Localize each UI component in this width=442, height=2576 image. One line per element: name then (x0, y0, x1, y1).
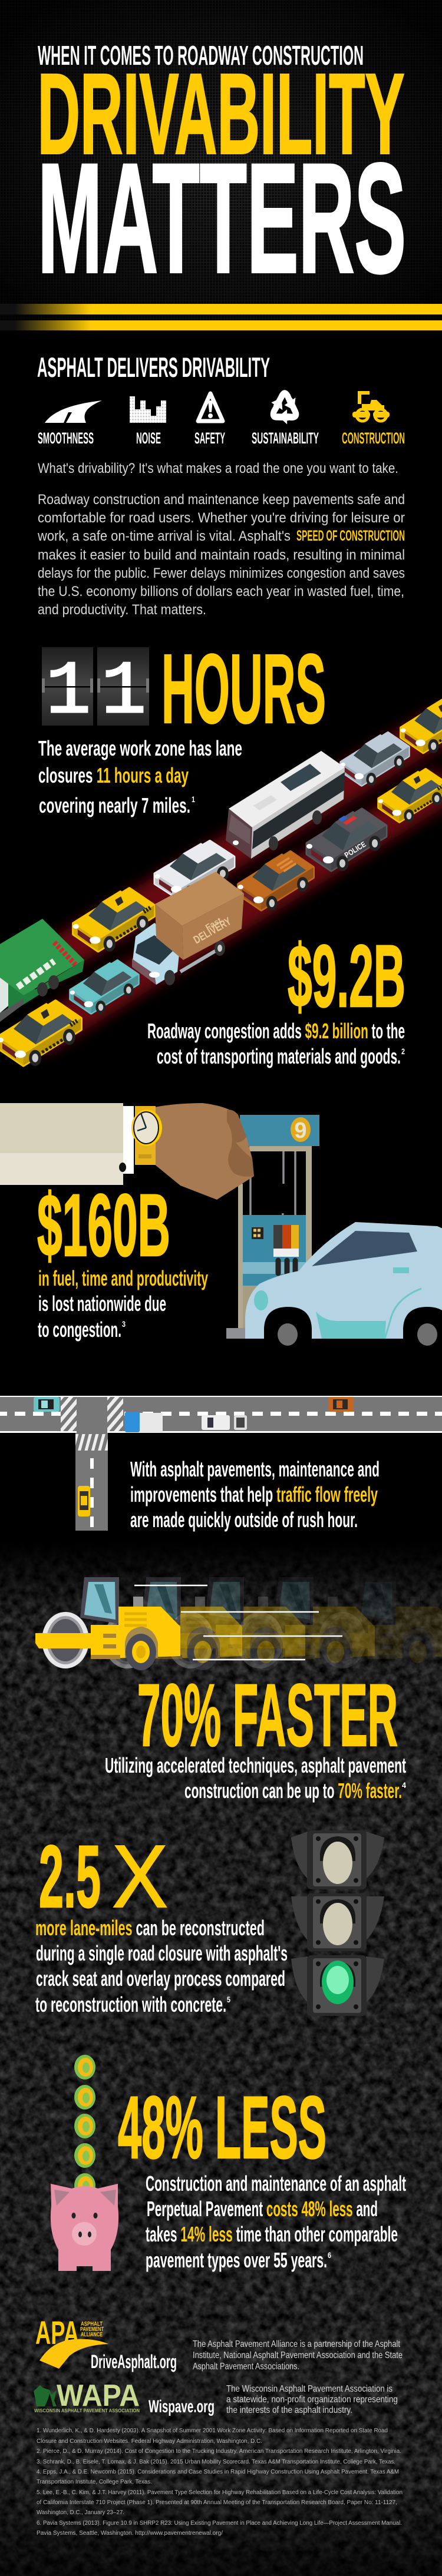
flip clock: 11: 1 (101, 650, 146, 735)
car at pump (245, 1222, 442, 1349)
logo: asphalt pavement alliance: ASPHALT (81, 2320, 103, 2327)
text: wapa description (226, 2384, 398, 2415)
text: traffic flow freely: improvements that help traffic flow freely (130, 1482, 378, 1506)
police car: POLICE (343, 839, 368, 860)
teal car (34, 1397, 60, 1412)
text: cost comparison: Perpetual Pavement costs 48% less and (147, 2197, 378, 2221)
website: wispave: Wispave.org (149, 2397, 215, 2416)
text: cost comparison (146, 2171, 406, 2272)
text: apa description (193, 2339, 403, 2372)
icon: noise equalizer (130, 396, 166, 423)
logo: asphalt pavement alliance (35, 2314, 108, 2369)
text: wapa description: the interests of the asphalt industry. (226, 2405, 352, 2415)
vertical road (75, 1433, 108, 1531)
top view cars (34, 1397, 354, 1517)
main roller (35, 1577, 180, 1670)
white van (202, 1415, 247, 1430)
coins falling (74, 2055, 95, 2198)
icon: sustainability recycle (268, 393, 300, 426)
icon: construction roller (352, 391, 390, 421)
top signal (307, 1830, 367, 1889)
logo: wapa: WISCONSIN ASPHALT PAVEMENT ASSOCIATION (34, 2408, 140, 2413)
panel: asphalt delivers drivability: SMOOTHNESS (38, 429, 94, 447)
body paragraph: makes it easier to build and maintain roads, resulting in minimal (38, 547, 405, 563)
ghost roller 2 (160, 1577, 305, 1670)
delivery truck: Fast (204, 915, 223, 932)
body paragraph: comfortable for road users. Whether you're driving for leisure or (38, 510, 405, 526)
text: average work zone (38, 736, 242, 817)
fuel hoses (250, 1151, 296, 1284)
taxi top right (400, 696, 442, 753)
title (38, 40, 406, 306)
page black background (0, 330, 442, 1567)
text: fuel time productivity: in fuel, time and productivity (38, 1266, 208, 1290)
station sign (240, 1115, 319, 1146)
hand (154, 1103, 254, 1200)
sleeve (0, 1103, 123, 1185)
stat: 2.5x: X (112, 1826, 168, 1926)
shirt cuff (123, 1106, 134, 1174)
body paragraph (37, 492, 405, 618)
orange car (328, 1397, 354, 1412)
traffic light (291, 1830, 384, 2016)
references: 1. Wunderlich, K., & D. Hardesty (2003). A Snapshot of Summer 2001 Work Zone Activity: Based on Information Reported on State Road (37, 2428, 388, 2434)
bottom signal lit green (307, 1955, 367, 2016)
panel: asphalt delivers drivability: SAFETY (194, 429, 225, 447)
label: sustainability: SUSTAINABILITY (252, 429, 319, 447)
text: more lane miles: to reconstruction with concrete. (35, 1992, 226, 2017)
references: 2. Pierce, D., & D. Murray (2014). Cost of Congestion to the Trucking Industry. American Transportation Research Institute, Arlington, Virginia. (37, 2448, 401, 2455)
text: fuel time productivity: to congestion. (38, 1317, 121, 1342)
roller with motion trail (35, 1577, 442, 1670)
taxi bottom (0, 1001, 81, 1066)
blue and white truck (125, 1412, 163, 1432)
delivery truck: DELIVERY (192, 915, 233, 946)
references: of California Interstate 710 Project (Phase 1). Presented at 90th Annual Meeting of the Transportation Research Board, Paper No: 11-1127, (37, 2499, 397, 2506)
references (37, 2428, 403, 2537)
text: apa description: The Asphalt Pavement Alliance is a partnership of the Asphalt (193, 2339, 400, 2349)
cuff button (119, 1163, 126, 1172)
text: more lane miles (35, 1916, 288, 2017)
references: Transportation Institute, College Park, Texas. (37, 2479, 152, 2485)
delivery truck (132, 872, 244, 985)
body paragraph: the U.S. economy billions of dollars each year in wasted fuel, time, (38, 584, 404, 600)
icon: safety warning triangle (198, 393, 223, 421)
flip clock: 11 (42, 647, 149, 735)
ghost roller 1 (97, 1577, 242, 1670)
logo: asphalt pavement alliance: PAVEMENT (80, 2326, 104, 2333)
text: congestion cost: Roadway congestion adds $9.2 billion to the (147, 1019, 405, 1043)
references: 6. Pavia Systems (2013). Figure 10.9 in SHRP2 R23: Using Existing Pavement in Place and Achieving Long Life—Project Assessment Manual. (37, 2520, 402, 2527)
text: accelerated techniques: construction can be up to 70% faster. (184, 1779, 402, 1803)
panel: asphalt delivers drivability (37, 352, 405, 618)
watch (131, 1106, 162, 1165)
text: average work zone: closures 11 hours a day (38, 763, 189, 787)
text: wapa description: a statewide, non-profit organization representing (226, 2395, 398, 2405)
text: accelerated techniques (105, 1753, 406, 1803)
traffic jam illustration (0, 696, 442, 1066)
middle signal (307, 1893, 367, 1951)
text: accelerated techniques: 4 (402, 1780, 406, 1790)
flip clock: 11: 1 (46, 650, 91, 735)
references: 5. Lee, E.-B., C. Kim, & J.T. Harvey (2011). Pavement Type Selection for Highway Rehabilitation Based on a Life-Cycle Cost Analysis: Validation (37, 2489, 403, 2496)
ghost roller 3 (230, 1577, 375, 1670)
text: fuel time productivity: is lost nationwide due (38, 1292, 166, 1316)
brake light glow (35, 721, 442, 1039)
references: Washington, D.C., January 23–27. (37, 2509, 124, 2516)
references: 3. Schrank, D., B. Eisele, T. Lomax, & J. Bak (2015). 2015 Urban Mobility Scorecard. Texas A&M Transportation Institute, College Park, Texas. (37, 2459, 395, 2465)
stat: 2.5x: 2.5 (39, 1827, 101, 1926)
text: apa description: Asphalt Pavement Associations. (193, 2362, 299, 2372)
text: traffic flow freely (130, 1457, 380, 1532)
text: congestion cost (147, 1019, 405, 1068)
text: average work zone: The average work zone has lane (38, 736, 242, 760)
side wings (291, 1832, 384, 2002)
speed lines (134, 1585, 342, 1660)
text: fuel time productivity: 3 (122, 1319, 126, 1329)
white car (154, 841, 234, 900)
taxi lower (73, 889, 154, 952)
text: cost comparison: 6 (328, 2250, 331, 2260)
text: congestion cost: 2 (401, 1047, 405, 1056)
text: average work zone: covering nearly 7 miles. (39, 793, 190, 817)
references: Pavia Systems, Seattle, Washington. http://www.pavementrenewal.org/ (37, 2530, 223, 2537)
logo: asphalt pavement alliance: APA (35, 2314, 79, 2351)
station frame (238, 1146, 312, 1328)
orange suv (238, 852, 314, 910)
yellow header bars (0, 304, 442, 330)
taxi right (378, 769, 442, 822)
yellow taxi (78, 1486, 90, 1517)
ghost roller 4 (312, 1577, 442, 1670)
stat: $160B: $160B (37, 1176, 170, 1274)
website: driveasphalt: DriveAsphalt.org (91, 2351, 177, 2372)
body paragraph: and productivity. That matters. (38, 602, 206, 618)
logo: asphalt pavement alliance: ALLIANCE (81, 2331, 103, 2338)
piggy bank (51, 2184, 118, 2271)
logo: wapa: WAPA (57, 2379, 140, 2413)
teal car (70, 961, 138, 1014)
asphalt texture background (0, 1543, 442, 2576)
road intersection illustration (0, 1396, 442, 1531)
gas station illustration (226, 1115, 442, 1349)
references: Closure and Construction Websites. Federal Highway Administration, Washington, D.C. (37, 2438, 262, 2445)
silver suv (341, 733, 409, 786)
body paragraph: work, a safe on-time arrival is vital. Asphalt's (37, 528, 291, 544)
police car (306, 809, 386, 871)
horizontal road (0, 1396, 442, 1433)
text: fuel time productivity (38, 1266, 208, 1342)
garbage truck (0, 919, 84, 1022)
bus (226, 751, 345, 859)
station sign: 9 (294, 1118, 307, 1143)
top background with grid texture (0, 0, 442, 330)
panel: asphalt delivers drivability: NOISE (136, 429, 161, 447)
hand with wristwatch (0, 1103, 254, 1200)
fuel pump (226, 1215, 306, 1339)
text: more lane miles: more lane-miles can be reconstructed (35, 1916, 265, 1940)
icon: smoothness road (45, 400, 102, 423)
text: more lane miles: 5 (227, 1995, 230, 2004)
text: wapa description: The Wisconsin Asphalt Pavement Association is (226, 2384, 392, 2394)
references: 4. Epps, J.A., & D.E. Newcomb (2015). Considerations and Case Studies in Rapid Highway Construction Using Asphalt Pavement. Texas A&M (37, 2469, 399, 2475)
text: average work zone: 1 (192, 794, 195, 804)
